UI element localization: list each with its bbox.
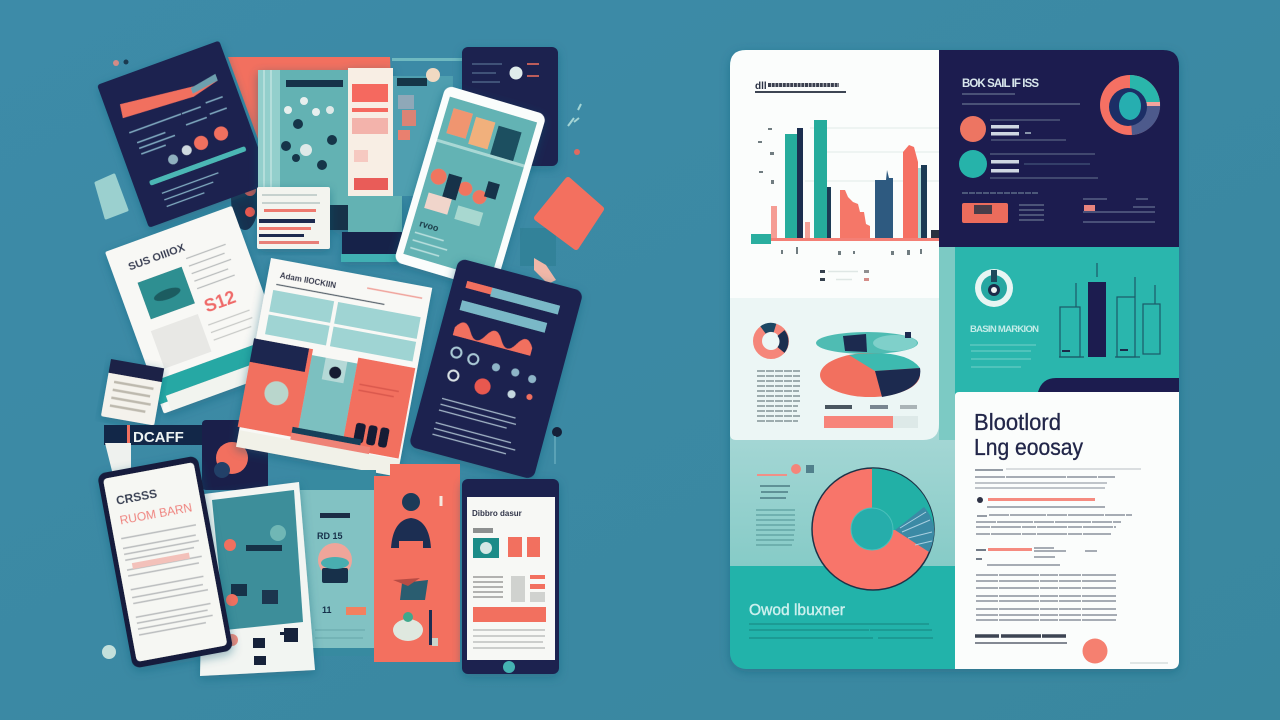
gridlines — [805, 128, 939, 181]
panel: light pie — [730, 298, 939, 440]
light teal leaflet — [300, 470, 376, 656]
navy tilted report — [97, 41, 271, 228]
navy heading: BOK SAIL IF ISS — [962, 78, 1039, 90]
collage of documents — [96, 41, 601, 676]
navy phone with article: CRSSS — [115, 487, 158, 508]
light panel labels and bar — [824, 405, 918, 428]
light panel notes — [757, 371, 800, 421]
article title: Lng eoosay — [974, 434, 1083, 460]
white tablet with teal page — [200, 482, 315, 676]
bars — [751, 120, 939, 244]
icon: ring — [975, 269, 1013, 307]
chart heading: dll — [755, 81, 767, 92]
small paper with bars — [257, 187, 330, 249]
small receipt card — [101, 359, 164, 425]
heading strip — [104, 425, 202, 475]
shadow under coral square — [520, 228, 556, 266]
pie notes — [756, 464, 814, 545]
axis ticks — [758, 128, 922, 255]
loose sticky — [96, 175, 127, 218]
white article sheet — [105, 206, 291, 414]
white tablet — [394, 85, 547, 291]
navy phone with article: RUOM BARN — [119, 500, 193, 527]
article title: Blootlord — [974, 409, 1061, 435]
navy data tablet — [409, 258, 584, 480]
light teal leaflet: RD 15 — [317, 531, 343, 541]
coral square — [537, 180, 601, 247]
panel: big pie — [756, 464, 934, 590]
bullet — [977, 497, 983, 503]
chart heading — [755, 81, 846, 93]
right teal page with tiles — [393, 68, 453, 196]
stat coral — [960, 116, 1066, 142]
stat teal — [959, 150, 1098, 178]
footer heading: Owod lbuxner — [749, 602, 845, 619]
coral poster — [374, 464, 460, 662]
infographic poster — [730, 50, 1179, 669]
coral sheet behind — [228, 57, 462, 150]
panel: white article — [955, 392, 1179, 669]
navy card top right — [462, 47, 558, 166]
white article sheet: SUS OIIIOX — [127, 242, 187, 273]
light teal backdrop — [730, 420, 955, 566]
navy tab — [1038, 378, 1179, 392]
coral-and-white centre brochure: Adam IIOCKIIN — [279, 271, 337, 290]
small donut — [758, 327, 784, 354]
panel: teal metrics — [939, 247, 1179, 440]
metrics heading: BASIN MARKION — [970, 324, 1039, 335]
coral dot — [1082, 638, 1108, 664]
white tablet: rvoo — [418, 218, 440, 234]
column chart — [1059, 263, 1160, 357]
coral-and-white centre brochure — [234, 258, 432, 477]
stacked 3D pie — [816, 332, 920, 397]
donut chart: navy panel — [1100, 75, 1160, 135]
pie chart — [812, 468, 934, 590]
poster base — [730, 50, 1179, 669]
navy card behind phone — [202, 420, 268, 490]
small coral scrap — [534, 258, 556, 284]
panel: navy summary — [939, 50, 1179, 247]
small dots — [102, 60, 581, 659]
dark smartphone: Dibbro dasur — [472, 509, 522, 518]
legend — [820, 270, 869, 281]
coral callout — [962, 193, 1155, 223]
coral highlights — [988, 498, 1095, 551]
heading strip: DCAFF — [133, 429, 184, 446]
teal binder page — [258, 68, 402, 262]
article footer text — [975, 636, 1067, 643]
pin — [552, 427, 562, 464]
dark smartphone — [462, 479, 559, 674]
article title — [974, 409, 1083, 460]
light teal leaflet: 11 — [322, 605, 332, 615]
article body — [975, 469, 1141, 620]
white article sheet: S12 — [201, 287, 238, 317]
navy phone with article — [97, 455, 233, 669]
round badge on navy doc — [231, 166, 259, 230]
panel: bar chart — [730, 50, 940, 298]
panel: teal footer — [749, 602, 933, 638]
